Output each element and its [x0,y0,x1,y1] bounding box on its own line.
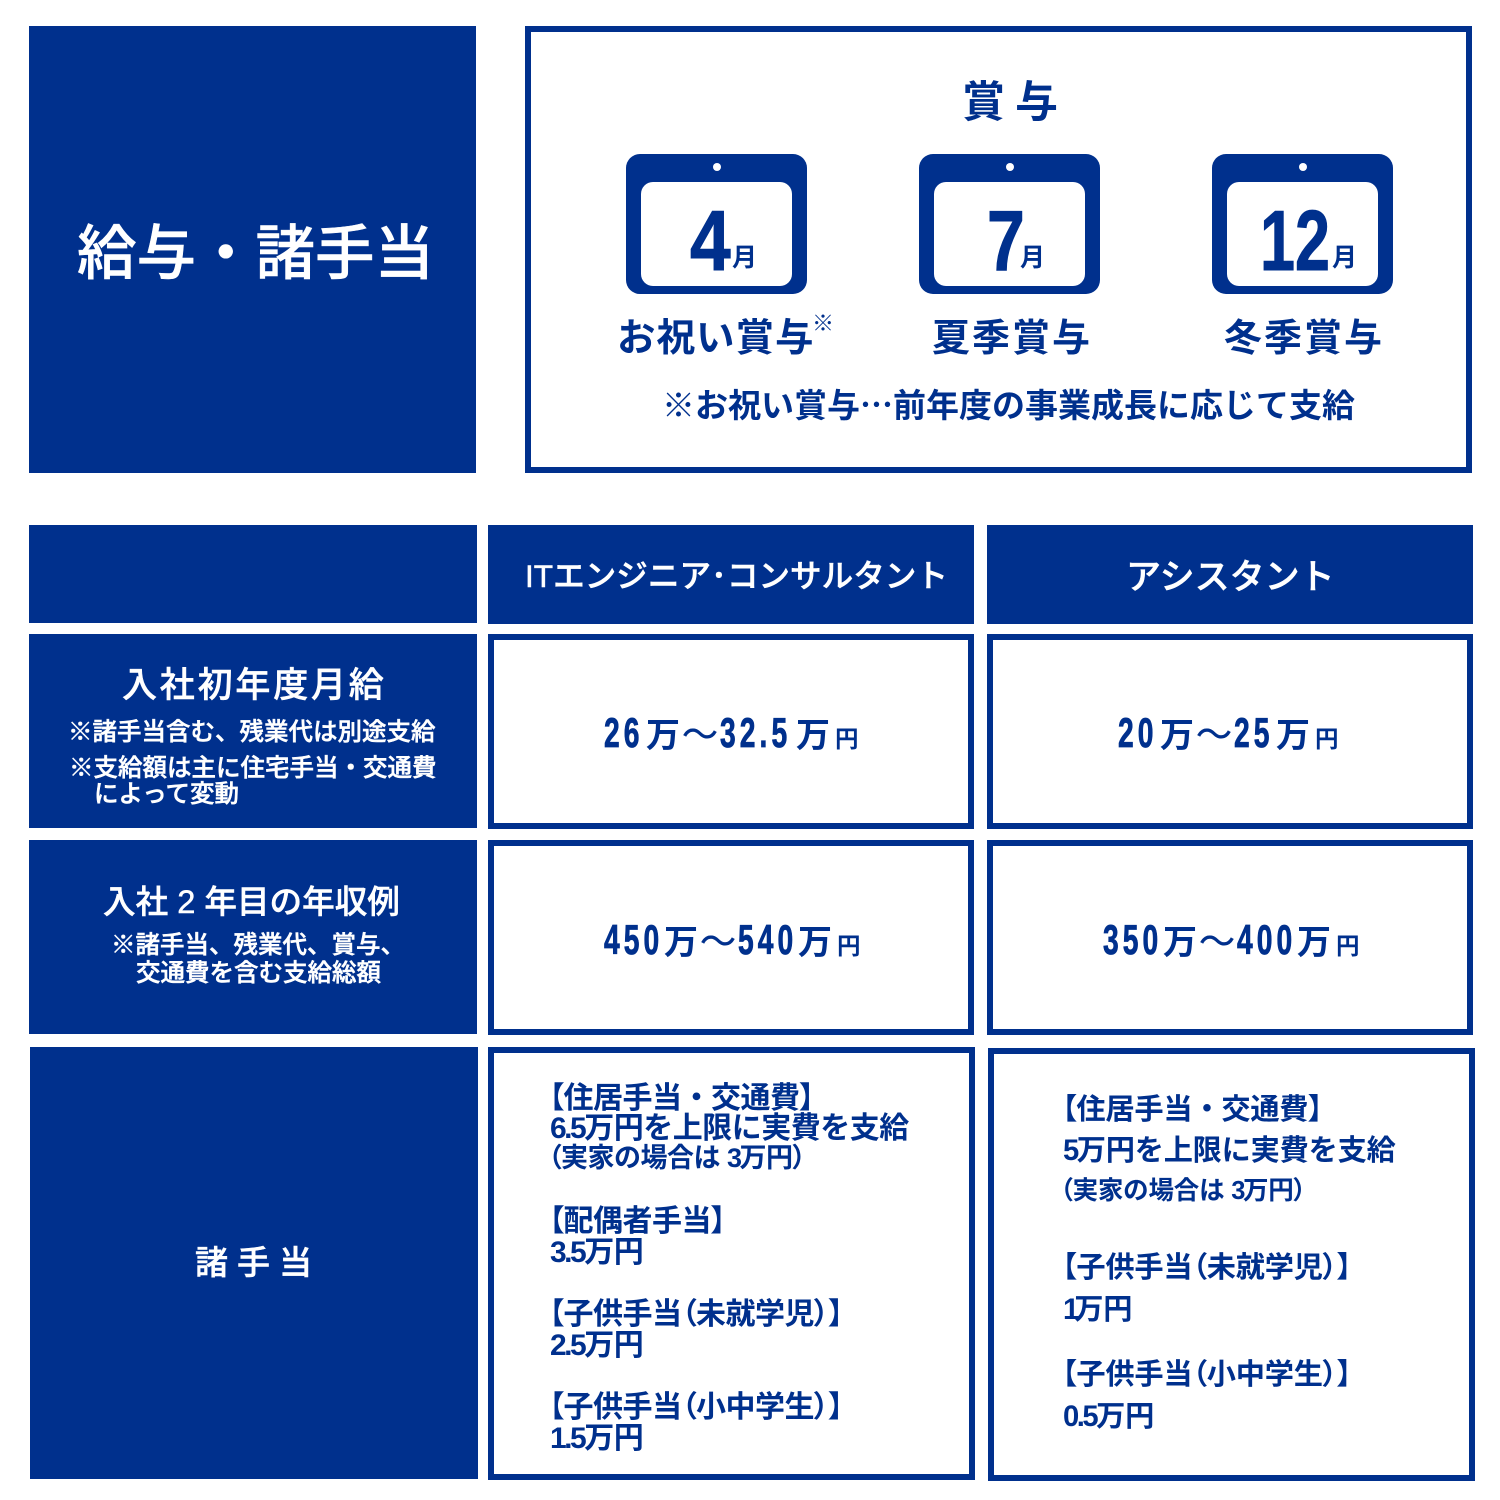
December unit: 月 [1332,244,1357,272]
value: first year assistant: 20 [1118,709,1158,756]
spouse allowance: 【配偶者手当】 [549,1205,726,1238]
housing allowance: （実家の場合は 3万円） [548,1143,806,1173]
icon: calendar April [626,154,807,294]
value: second year IT engineer [604,916,860,963]
child allowance school: 0.5万円 [1063,1401,1154,1433]
housing allowance: （実家の場合は 3万円） [1060,1177,1306,1205]
note: salary includes: ※諸手当含む、残業代は別途支給 [68,719,436,746]
child allowance preschool: 【子供手当（未就学児）】 [549,1298,843,1331]
value: second year assistant: 万 [1163,924,1197,962]
value: second year IT engineer: 万 [798,924,832,962]
cell: first year IT engineer [488,634,974,829]
note: pay varies: によって変動 [94,781,239,808]
header: empty corner [29,525,477,623]
cell: allowances assistant [988,1048,1475,1481]
value: second year IT engineer: 円 [837,933,860,959]
value: first year IT engineer: 万 [796,717,830,755]
December number: 12 [1260,194,1330,289]
value: second year IT engineer: 万 [664,924,698,962]
label: winter bonus: 冬季賞与 [1224,318,1384,360]
child allowance school: 【子供手当（小中学生）】 [549,1391,843,1424]
panel: bonus [525,26,1472,473]
child allowance school: 【子供手当（小中学生）】 [1062,1359,1351,1391]
child allowance preschool: 【子供手当（未就学児）】 [1062,1252,1351,1284]
child allowance preschool: 1万円 [1063,1294,1132,1326]
child allowance school [549,1391,843,1455]
value: second year assistant: 400 [1237,916,1296,963]
housing allowance: 6.5万円を上限に実費を支給 [550,1112,909,1145]
header text: IT engineer: ITエンジニア･コンサルタント [525,558,948,594]
child allowance school: 1.5万円 [550,1422,643,1455]
value: first year assistant: 万 [1160,717,1194,755]
April unit: 月 [732,244,757,272]
April number: 4 [690,194,731,289]
value: second year IT engineer: 540 [738,916,797,963]
label: summer bonus: 夏季賞与 [932,318,1092,360]
value: first year IT engineer: 万 [646,717,680,755]
value: second year IT engineer: ～ [700,921,736,962]
heading: second year income: 入社 2 年目の年収例 [103,883,400,920]
title: 給与・諸手当 [77,220,434,287]
child allowance preschool [1062,1252,1351,1326]
housing allowance: 【住居手当・交通費】 [1062,1094,1323,1126]
header text: assistant: アシスタント [1126,558,1335,597]
housing allowance [1060,1094,1396,1205]
housing allowance: 5万円を上限に実費を支給 [1063,1135,1396,1167]
value: first year assistant: ～ [1196,714,1232,755]
child allowance preschool: 2.5万円 [550,1329,643,1362]
value: first year assistant: 万 [1276,717,1310,755]
header: IT engineer [488,525,974,624]
value: first year IT engineer: 円 [835,726,858,752]
heading: allowances: 諸手当 [195,1244,321,1281]
value: first year IT engineer: 26 [604,709,644,756]
icon: calendar December [1212,154,1393,294]
housing allowance [548,1082,909,1173]
icon: calendar July [919,154,1100,294]
value: second year assistant [1103,916,1360,963]
value: second year assistant: 350 [1103,916,1162,963]
value: second year assistant: 円 [1336,933,1360,959]
spouse allowance [549,1205,726,1269]
value: first year assistant: 25 [1234,709,1274,756]
note: pay varies: ※支給額は主に住宅手当・交通費 [69,755,436,782]
value: first year IT engineer [604,709,858,756]
value: first year IT engineer: ～ [682,714,718,755]
bonus note: ※お祝い賞与…前年度の事業成長に応じて支給 [662,379,1355,427]
cell: second year assistant [987,840,1473,1035]
bonus heading: 賞与 [962,79,1068,127]
title panel [29,26,476,473]
value: first year IT engineer: 32.5 [720,709,791,756]
allowances list: IT engineer [548,1082,909,1455]
value: second year assistant: ～ [1199,921,1235,962]
value: first year assistant [1118,709,1338,756]
row label: second year income [29,840,477,1034]
note: pay varies [69,754,436,808]
note: total pay includes: ※諸手当、残業代、賞与、 [111,932,405,959]
July unit: 月 [1020,244,1045,272]
child allowance school [1062,1359,1351,1433]
text: ※ [812,311,835,336]
cell: first year assistant [987,634,1473,829]
note: total pay includes [111,932,405,987]
value: first year assistant: 円 [1315,726,1338,752]
value: second year IT engineer: 450 [604,916,663,963]
cell: allowances IT engineer [488,1047,975,1480]
cell: second year IT engineer [488,840,974,1035]
housing allowance: 【住居手当・交通費】 [549,1082,814,1115]
spouse allowance: 3.5万円 [550,1236,643,1269]
row label: first year monthly salary [29,634,477,828]
allowances list: assistant [1060,1094,1396,1433]
July number: 7 [987,194,1025,289]
row label: allowances [30,1047,478,1479]
value: second year assistant: 万 [1297,924,1331,962]
child allowance preschool [549,1298,843,1362]
header: assistant [987,525,1473,624]
note: total pay includes: 交通費を含む支給総額 [136,960,381,987]
label: celebration bonus: お祝い賞与 [617,317,815,360]
heading: first year monthly salary: 入社初年度月給 [122,666,387,705]
